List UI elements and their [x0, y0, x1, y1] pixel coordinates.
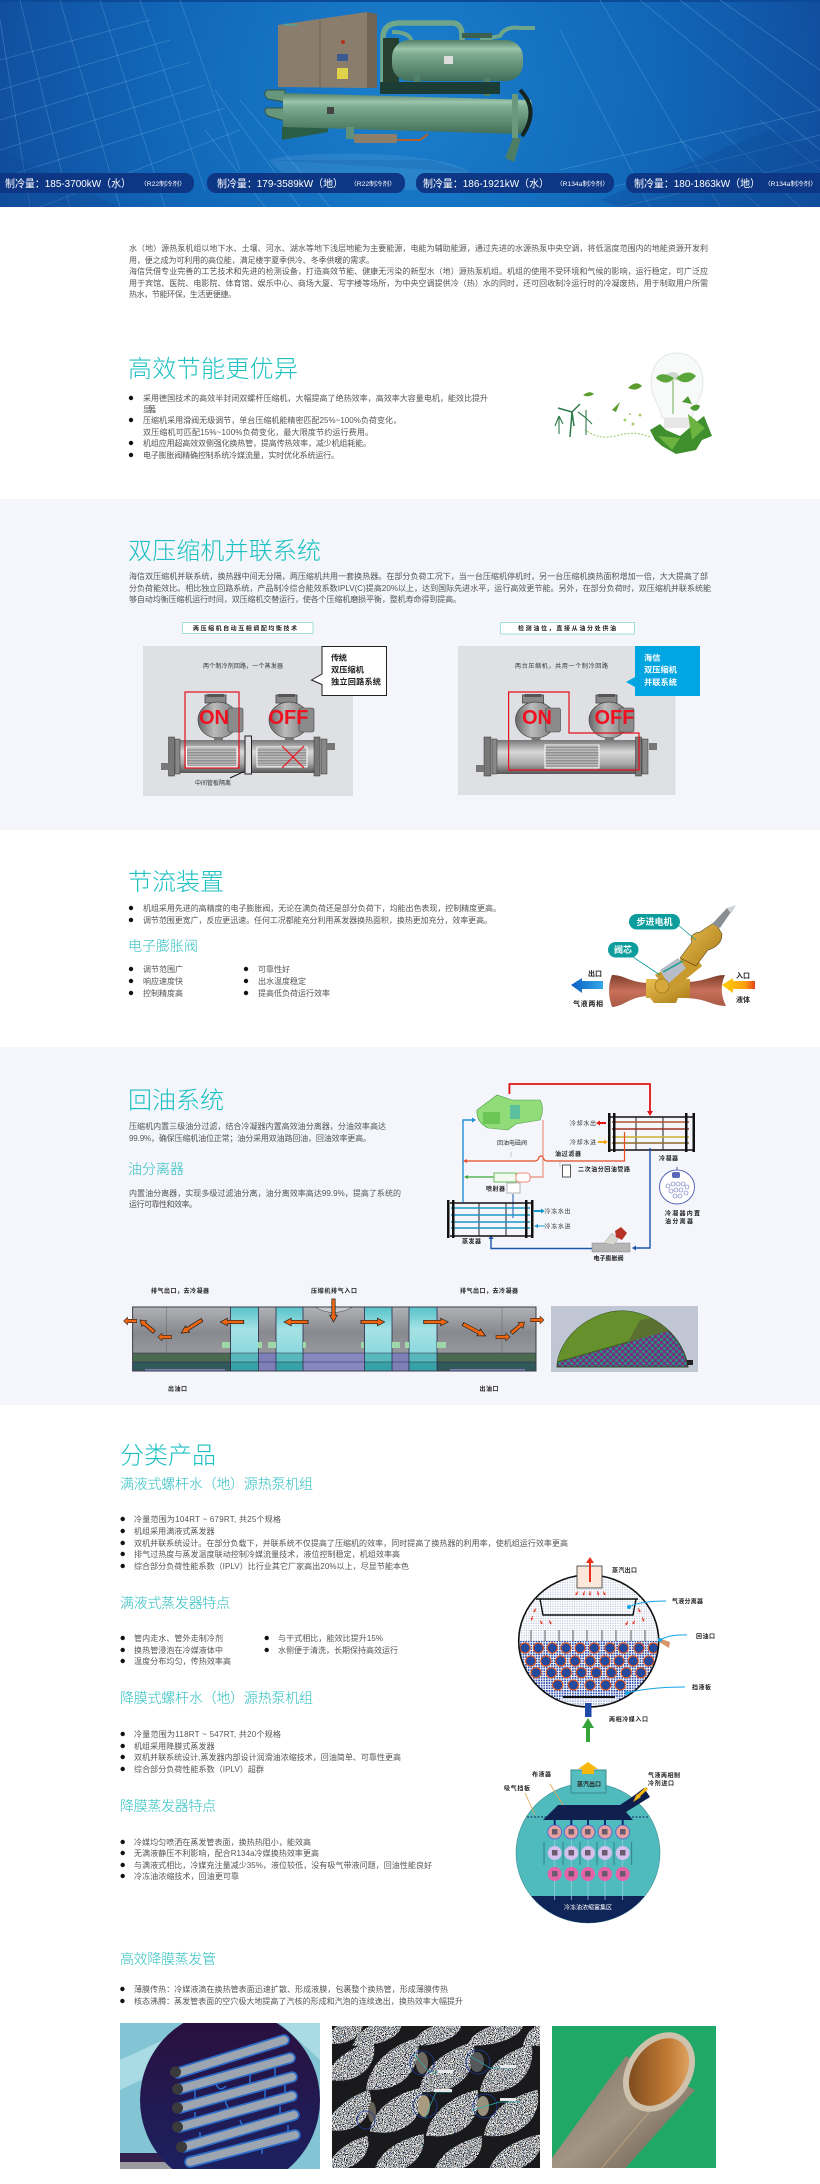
diagram: Hisense parallel system: ON	[522, 707, 552, 729]
throttling bullet list: 机组采用先进的高精度的电子膨胀阀，无论在满负荷还是部分负荷下，均能出色表现，控制精度更高。	[143, 903, 501, 913]
description paragraph: 够自动均衡压缩机运行时间，双压缩机交替运行，使各个压缩机磨损平衡，整机寿命得到提高。	[129, 594, 461, 604]
building wireframe background lines	[0, 0, 820, 207]
diagram: expansion valve: 液体	[736, 995, 750, 1004]
efficiency bullet list	[129, 393, 488, 460]
capacity pill 1: （R22制冷剂）	[140, 180, 186, 188]
description paragraph	[129, 571, 711, 604]
heading: high efficiency falling film tube: 高效降膜蒸发管	[120, 1951, 216, 1967]
heading: 双压缩机并联系统	[128, 538, 321, 565]
oil return paragraph: 压缩机内置三级油分过滤，结合冷凝器内置高效油分离器，分油效率高达	[129, 1121, 386, 1131]
diagram: expansion valve: 气液两相	[573, 999, 603, 1008]
heading: 回油系统	[128, 1088, 224, 1114]
expansion valve feature list: 响应速度快	[143, 976, 183, 986]
expansion valve feature list	[129, 964, 330, 998]
pill: valve core	[608, 942, 638, 958]
description paragraph: 海信双压缩机并联系统，换热器中间无分隔，两压缩机共用一套换热器。在部分负荷工况下，当一台压缩机停机时，另一台压缩机换热面积增加一倍，大大提高了部	[129, 571, 708, 581]
capacity pill 2: 制冷量：179-3589kW（地）	[217, 177, 343, 190]
diagram: expansion valve: 出口	[588, 969, 602, 978]
capacity pill 3: 制冷量：186-1921kW（水）	[423, 177, 549, 190]
flooded evaporator bullet list: 换热管浸泡在冷媒液体中	[134, 1645, 223, 1655]
intro paragraph	[129, 243, 708, 299]
diagram: falling film evaporator cross section	[504, 1762, 680, 1926]
expansion valve feature list: 控制精度高	[143, 988, 183, 998]
oil separator paragraph: 内置油分离器，实现多级过滤油分离，油分离效率高达99.9%，提高了系统的	[129, 1188, 401, 1198]
product: water source heat pump unit	[264, 12, 535, 190]
diagram: oil separator longitudinal section: 排气出口，去冷凝器	[460, 1287, 518, 1295]
flooded evaporator bullet list: 温度分布均匀，传热效率高	[134, 1656, 231, 1666]
label box: left: 两压缩机自动互相调配均衡技术	[193, 624, 297, 632]
diagram: oil return circuit: 电子膨胀阀	[594, 1254, 624, 1262]
falling film evaporator bullet list: 冷冻油浓缩技术，回油更可靠	[134, 1871, 239, 1881]
panel: dual compressor section	[0, 499, 820, 830]
diagram: oil separator longitudinal section: 压缩机排气入口	[311, 1287, 357, 1295]
product: water source heat pump unit: Hisense	[283, 22, 298, 27]
subheading: electronic expansion valve: 电子膨胀阀	[128, 938, 198, 954]
diagram: oil return circuit: 蒸发器	[462, 1238, 481, 1246]
capacity pill 3	[416, 173, 614, 193]
diagram: flooded evaporator cross section: 回油口	[696, 1632, 715, 1640]
diagram: oil return circuit: 回油电磁阀	[497, 1139, 527, 1147]
heading: high efficiency: 高效节能更优异	[128, 356, 298, 383]
diagram: traditional independent circuit: OFF	[268, 707, 308, 729]
falling film unit bullet list: 双机并联系统设计,蒸发器内部设计润滑油浓缩技术，回油简单、可靠性更高	[134, 1752, 401, 1762]
callout: Hisense: 并联系统	[644, 677, 677, 687]
flooded evaporator bullet list: 与干式相比，能效比提升15%	[278, 1633, 383, 1643]
falling film tube bullet list: 薄膜传热：冷媒液滴在换热管表面迅速扩散、形成液膜，包裹整个换热管，形成薄膜传热	[134, 1984, 448, 1994]
diagram: oil return circuit: 冷却水进	[570, 1138, 596, 1146]
expansion valve feature list: 可靠性好	[258, 964, 290, 974]
diagram: Hisense parallel system: 两台压缩机，共用一个制冷回路	[515, 662, 608, 670]
subheading: falling film evaporator features: 降膜蒸发器特点	[120, 1798, 216, 1814]
diagram: oil return circuit: 油过滤器	[555, 1150, 581, 1158]
diagram: oil return circuit: 冷凝器内置	[665, 1210, 700, 1218]
panel: oil return section	[0, 1047, 820, 1405]
label box: left	[182, 622, 313, 634]
diagram: oil separator longitudinal section: 排气出口，去冷凝器	[151, 1287, 209, 1295]
diagram: falling film evaporator cross section: 冷冻油浓缩富集区	[564, 1904, 612, 1912]
expansion valve feature list: 出水温度稳定	[258, 976, 306, 986]
falling film unit bullet list: 冷量范围为118RT ~ 547RT, 共20个规格	[134, 1729, 281, 1739]
electronic expansion valve icon	[592, 1227, 630, 1252]
arrow: inlet	[722, 978, 755, 993]
intro paragraph: 海信凭借专业完善的工艺技术和先进的检测设备，打造高效节能、健康无污染的新型水（地）源热泵机组。机组的使用不受环境和气候的影响，运行稳定，可广泛应	[129, 266, 708, 276]
diagram: falling film evaporator cross section: 气液两相制	[648, 1772, 680, 1780]
diagram: flooded evaporator cross section	[515, 1557, 715, 1742]
subheading: oil separator: 油分离器	[128, 1161, 184, 1177]
diagram: traditional independent circuit	[143, 646, 353, 796]
flooded unit bullet list	[120, 1514, 568, 1571]
diagram: flooded evaporator cross section: 挡液板	[692, 1684, 711, 1692]
efficiency bullet list: 压缩机采用滑阀无级调节，单台压缩机能精密匹配25%~100%负荷变化，	[143, 415, 401, 425]
expansion valve feature list: 调节范围广	[143, 964, 183, 974]
callout: traditional	[312, 646, 386, 696]
pill: valve core: 阀芯	[614, 944, 632, 955]
efficiency bullet list: 机组应用超高效双侧强化换热管，提高传热效率，减少机组耗能。	[143, 438, 371, 448]
evaporator	[447, 1200, 534, 1238]
flooded unit bullet list: 排气过热度与蒸发温度联动控制冷媒流量技术，液位控制稳定，机组效率高	[134, 1549, 400, 1559]
diagram: flooded evaporator cross section: 蒸汽出口	[612, 1566, 637, 1574]
ejector	[494, 1173, 530, 1193]
diagram: traditional independent circuit: 两个制冷剂回路，一个蒸发器	[203, 662, 283, 670]
intro paragraph: 热水，节能环保，生活更便捷。	[129, 289, 236, 299]
flooded evaporator bullet list: 管内走水、管外走制冷剂	[134, 1633, 223, 1643]
efficiency bullet list: 电子膨胀阀精确控制系统冷媒流量，实时优化系统运行。	[143, 450, 339, 460]
capacity pill 2	[207, 173, 405, 193]
falling film unit bullet list: 机组采用降膜式蒸发器	[134, 1741, 214, 1751]
diagram: oil separator cross section	[550, 1305, 698, 1372]
intro paragraph: 用，便之成为可利用的高位能，满足楼宇夏季供冷、冬季供暖的需求。	[129, 255, 374, 265]
heading: product categories: 分类产品	[120, 1442, 216, 1470]
capacity pill 3: （R134a制冷剂）	[556, 180, 609, 188]
capacity pill 4: （R134a制冷剂）	[764, 180, 817, 188]
diagram: oil return circuit: 冷却水出	[570, 1120, 596, 1128]
subheading: falling film screw unit: 降膜式螺杆水（地）源热泵机组	[120, 1690, 313, 1706]
pill: stepper motor	[629, 914, 680, 930]
oil return paragraph: 99.9%，确保压缩机油位正常；油分采用双油路回油，回油效率更高。	[129, 1133, 371, 1143]
intro paragraph: 水（地）源热泵机组以地下水、土壤、河水、湖水等地下浅层地能为主要能源，电能为辅助能源，通过先进的水源热泵中央空调，将低温度范围内的地能资源开发利	[129, 243, 708, 253]
pill: stepper motor: 步进电机	[636, 916, 672, 927]
falling film evaporator bullet list	[120, 1837, 432, 1881]
diagram: flooded evaporator cross section: 两相冷媒入口	[609, 1716, 648, 1724]
expansion valve feature list: 提高低负荷运行效率	[258, 988, 330, 998]
falling film tube bullet list: 核态沸腾：蒸发管表面的空穴极大地提高了汽核的形成和汽泡的连续逸出，换热效率大幅提升	[134, 1996, 463, 2006]
capacity pill 1: 制冷量：185-3700kW（水）	[5, 177, 131, 190]
diagram: oil return circuit: 油分离器	[665, 1218, 693, 1226]
photo: refrigerant film on tubes	[120, 2023, 320, 2169]
diagram: expansion valve: 入口	[736, 972, 750, 980]
diagram: falling film evaporator cross section: 布液器	[532, 1770, 551, 1778]
falling film evaporator bullet list: 无满液静压不利影响，配合R134a冷媒换热效率更高	[134, 1848, 319, 1858]
falling film tube bullet list	[120, 1984, 463, 2006]
diagram: Hisense parallel system: OFF	[594, 707, 634, 729]
diagram: oil return circuit: 冷冻水出	[544, 1208, 570, 1216]
diagram: falling film evaporator cross section: 蒸汽出口	[577, 1780, 601, 1788]
diagram: oil return circuit	[447, 1084, 700, 1262]
capacity pill 1	[0, 173, 194, 193]
diagram: expansion valve	[571, 905, 755, 1008]
diagram: oil separator longitudinal section: 出油口	[168, 1385, 187, 1393]
efficiency bullet list: 采用德国技术的高效半封闭双螺杆压缩机，大幅提高了绝热效率，高效率大容量电机，能效比提升	[143, 393, 488, 403]
intro paragraph: 用于宾馆、医院、电影院、体育馆、娱乐中心、商场大厦、写字楼等场所，为中央空调提供冷（热）水的同时，还可回收制冷运行时的冷凝废热，用于制取用户所需	[129, 278, 708, 288]
capacity pill 4: 制冷量：180-1863kW（地）	[634, 177, 760, 190]
efficiency bullet list: 双压缩机可匹配15%~100%负荷变化，最大限度节约运行费用。	[143, 427, 373, 437]
callout: Hisense: 海信	[644, 652, 660, 662]
flooded evaporator bullet list: 水侧便于清洗，长期保持高效运行	[278, 1645, 398, 1655]
subheading: flooded evaporator features: 满液式蒸发器特点	[120, 1595, 230, 1611]
flooded evaporator bullet list	[120, 1633, 398, 1666]
photo: microscopic tube surface	[332, 2026, 540, 2168]
flooded unit bullet list: 冷量范围为104RT ~ 679RT, 共25个规格	[134, 1514, 281, 1524]
flooded unit bullet list: 综合部分负荷性能系数（IPLV）比行业其它厂家高出20%以上，尽显节能本色	[134, 1561, 409, 1571]
callout: Hisense	[626, 646, 700, 696]
photo: enhanced copper tube	[552, 2018, 716, 2172]
label box: right	[500, 622, 634, 634]
diagram: flooded evaporator cross section: 气液分离器	[672, 1598, 703, 1606]
diagram: Hisense parallel system	[458, 646, 676, 795]
diagram: traditional independent circuit: ON	[199, 707, 229, 729]
oil separator paragraph: 运行可靠性和效率。	[129, 1199, 197, 1209]
diagram: traditional independent circuit: 中间管板隔离	[195, 779, 231, 787]
falling film evaporator bullet list: 与满液式相比，冷媒充注量减少35%，液位较低，没有吸气带液问题，回油性能良好	[134, 1860, 432, 1870]
capacity pill 2: （R22制冷剂）	[350, 180, 396, 188]
heading: throttling device: 节流装置	[128, 869, 224, 896]
header banner	[0, 0, 820, 207]
flooded unit bullet list: 机组采用满液式蒸发器	[134, 1526, 214, 1536]
diagram: oil return circuit: 喷射器	[486, 1185, 505, 1193]
diagram: oil return circuit: 冷凝器	[659, 1154, 678, 1162]
callout: traditional: 独立回路系统	[331, 676, 381, 686]
callout: Hisense: 双压缩机	[644, 664, 678, 674]
throttling bullet list	[129, 903, 501, 925]
arrow: outlet	[571, 978, 603, 993]
label box: right: 检测油位，直接从油分处供油	[518, 624, 616, 632]
callout: traditional: 双压缩机	[331, 664, 365, 674]
diagram: oil separator longitudinal section: 出油口	[480, 1385, 498, 1393]
diagram: falling film evaporator cross section: 吸气挡板	[504, 1784, 530, 1792]
oil separator paragraph	[129, 1188, 401, 1209]
throttling bullet list: 调节范围更宽广，反应更迅速。任何工况都能充分利用蒸发器换热面积，换热更加充分，效率更高。	[143, 915, 492, 925]
compressor	[477, 1095, 542, 1130]
flow arrows	[124, 1299, 544, 1341]
condenser	[608, 1113, 695, 1152]
falling film unit bullet list: 综合部分负荷性能系数（IPLV）超群	[134, 1764, 264, 1774]
falling film unit bullet list	[120, 1729, 401, 1774]
diagram: falling film evaporator cross section: 冷剂进口	[648, 1780, 674, 1788]
efficiency bullet list: 显著。	[143, 404, 161, 414]
icon: condenser cross-section	[660, 1167, 694, 1204]
diagram: oil separator longitudinal section	[124, 1287, 544, 1393]
subheading: flooded screw unit: 满液式螺杆水（地）源热泵机组	[120, 1476, 313, 1492]
falling film evaporator bullet list: 冷媒均匀喷洒在蒸发管表面，换热热阻小，能效高	[134, 1837, 311, 1847]
oil return paragraph	[129, 1121, 386, 1143]
description paragraph: 分负荷能效比。相比独立回路系统，产品制冷综合能效系数IPLV(C)提高20%以上，达到国际先进水平，运行高效更节能。另外，在部分负荷时，双压缩机并联系统能	[129, 583, 711, 593]
flooded unit bullet list: 双机并联系统设计。在部分负载下，并联系统不仅提高了压缩机的效率，同时提高了换热器的利用率，使机组运行效率更高	[134, 1538, 568, 1548]
diagram: oil return circuit: 冷冻水进	[544, 1222, 570, 1230]
capacity pill 4	[626, 173, 820, 193]
callout: traditional: 传统	[331, 652, 347, 662]
diagram: oil return circuit: 二次油分回油管路	[578, 1166, 630, 1174]
icon: light bulb with plants and wind turbines	[555, 353, 712, 454]
